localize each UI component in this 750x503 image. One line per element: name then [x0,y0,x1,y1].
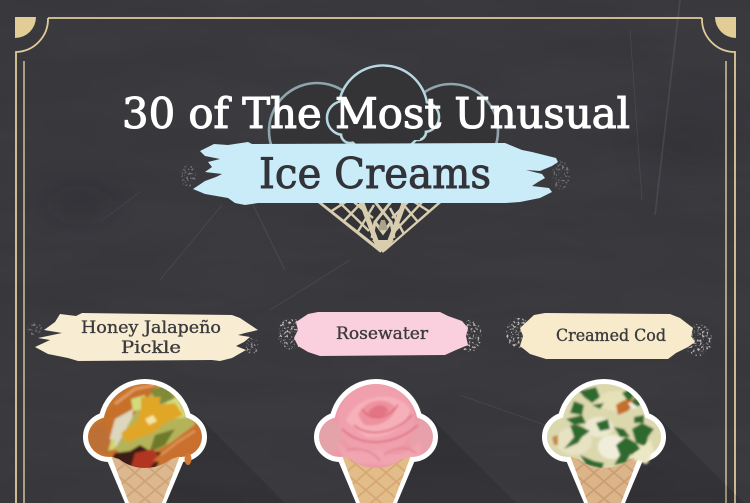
waffle cone [342,456,410,503]
waffle cone [112,456,180,503]
rose scoop photo [319,384,433,468]
hero icon: three-scoop heart ice cream [269,66,498,254]
waffle cone [570,456,638,503]
long shadow [376,413,516,503]
flavour label: Honey Jalapeño Pickle [26,313,259,361]
flavour label: Honey Jalapeño Pickle: Honey Jalapeño [81,318,221,338]
food scoop photo [88,384,202,468]
white sticker outline [319,384,433,503]
orange drip [184,453,192,465]
flavour label: Creamed Cod [506,313,712,359]
ice cream: honey jalapeño pickle [83,379,207,503]
ice cream: creamed cod [544,379,744,503]
flavour label: Honey Jalapeño Pickle: Pickle [121,338,181,358]
centre outline scoop [327,66,439,154]
flavour label: Creamed Cod: Creamed Cod [556,326,666,345]
white sticker outline [88,384,202,503]
cod scoop photo [547,384,661,468]
cream drip [634,439,651,464]
flavour label: Rosewater: Rosewater [336,324,428,343]
ice cream: rosewater [314,379,438,503]
flavour label: Rosewater [278,312,482,356]
right outline scoop [404,84,498,178]
long shadow [604,413,744,503]
white sticker outline [547,384,661,503]
blue brush banner [180,142,570,205]
left outline scoop [269,83,365,179]
lattice heart cone [318,203,441,253]
long shadow [145,413,285,503]
banner heading: Ice Creams [259,149,491,198]
title line: 30 of The Most Unusual [122,89,630,138]
